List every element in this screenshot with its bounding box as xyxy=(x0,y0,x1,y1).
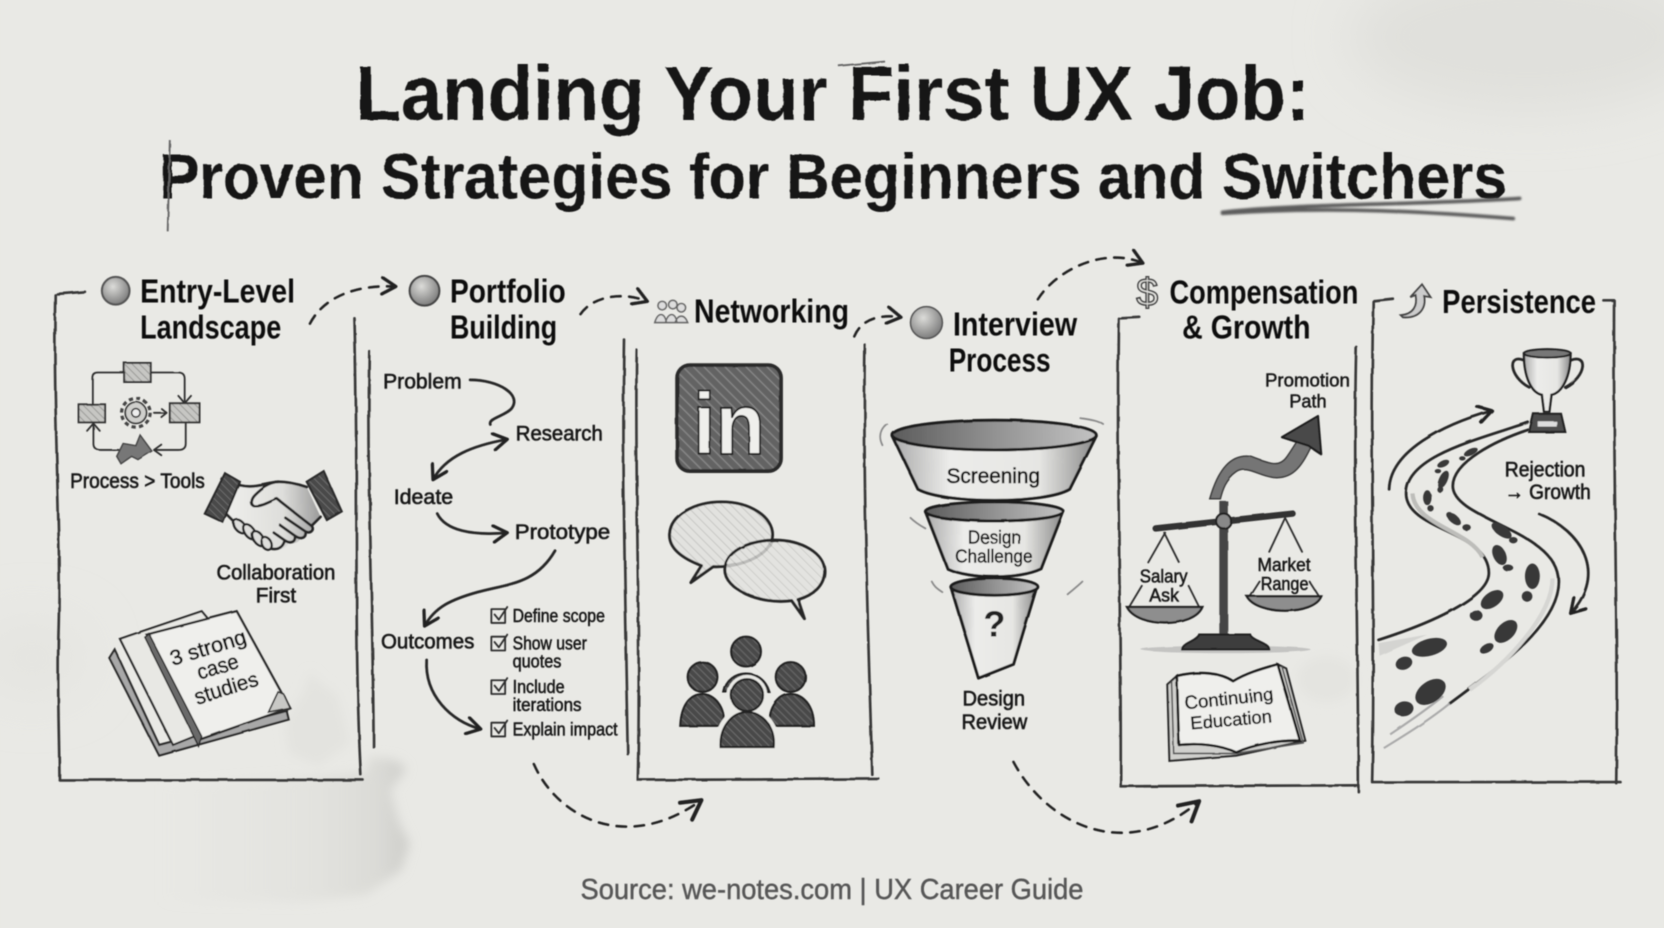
title: Proven Strategies for Beginners and Switchers xyxy=(159,141,1507,212)
process labels: problem to outcomes: Problem xyxy=(383,370,462,393)
icon: trophy xyxy=(1513,349,1583,432)
icon: open book continuing education: Education xyxy=(1189,706,1273,733)
panel: networking xyxy=(636,293,879,780)
icon: growth arrow xyxy=(1210,416,1321,499)
panel frame: networking xyxy=(636,345,879,780)
flow arrows: portfolio process xyxy=(425,380,555,729)
funnel stage: screening xyxy=(892,420,1096,500)
icon: balance scale xyxy=(1127,501,1321,653)
icon: stack of case studies xyxy=(109,611,290,756)
panel frame: compensation xyxy=(1118,317,1358,792)
heading: entry-level landscape xyxy=(102,272,295,346)
label: design review: Review xyxy=(961,711,1028,734)
label: collaboration first: Collaboration xyxy=(217,561,335,584)
heading: compensation and growth xyxy=(1136,271,1358,346)
heading: networking: Networking xyxy=(694,293,849,330)
scale labels: salary ask and market range: Salary xyxy=(1140,567,1187,587)
icon: winding road with footprints xyxy=(1379,411,1588,748)
scale labels: salary ask and market range: Range xyxy=(1261,574,1308,594)
checklist: Include xyxy=(513,677,565,697)
scale labels: salary ask and market range: Ask xyxy=(1149,586,1180,606)
funnel stage: design challenge xyxy=(925,502,1063,577)
dashed flow arrows xyxy=(310,258,1199,833)
footer source: Source: we-notes.com | UX Career Guide xyxy=(581,874,1083,906)
icon: stack of case studies: 3 strong xyxy=(167,626,249,671)
checklist: Explain impact xyxy=(513,719,618,739)
label: rejection to growth: Rejection xyxy=(1505,458,1585,481)
label: collaboration first xyxy=(217,561,335,608)
checklist: iterations xyxy=(513,695,582,715)
heading: interview process: Interview xyxy=(953,305,1078,342)
scale labels: salary ask and market range: Market xyxy=(1258,555,1311,575)
heading: entry-level landscape: Entry-Level xyxy=(140,272,295,309)
panel frame: entry-level xyxy=(55,292,363,780)
icon: speech bubbles xyxy=(670,502,825,619)
icon: handshake xyxy=(205,471,342,552)
panel frame: portfolio xyxy=(369,340,628,754)
heading: compensation and growth: $ xyxy=(1136,271,1158,315)
label: promotion path xyxy=(1265,370,1350,411)
label: rejection to growth xyxy=(1505,458,1591,504)
label: process over tools: Process > Tools xyxy=(70,470,205,493)
title: Landing Your First UX Job: xyxy=(356,51,1311,137)
checklist: Define scope xyxy=(513,606,605,626)
process labels: problem to outcomes: Research xyxy=(516,422,603,445)
heading: portfolio building: Building xyxy=(450,309,557,346)
panel: persistence xyxy=(1372,283,1620,783)
heading: entry-level landscape: Landscape xyxy=(140,309,281,346)
funnel stage: design challenge: Design xyxy=(968,527,1021,547)
panel: interview process xyxy=(881,305,1104,734)
funnel stage: screening: Screening xyxy=(947,465,1040,488)
funnel stage: design challenge: Challenge xyxy=(955,546,1033,566)
process labels: problem to outcomes xyxy=(381,370,610,653)
heading: portfolio building: Portfolio xyxy=(450,272,566,309)
heading: persistence: Persistence xyxy=(1442,283,1596,320)
title xyxy=(159,51,1507,231)
process labels: problem to outcomes: Outcomes xyxy=(381,630,474,653)
icon: stack of case studies: case xyxy=(194,650,242,685)
checklist: Show user xyxy=(513,633,587,653)
checklist xyxy=(491,606,618,739)
panel frame: persistence xyxy=(1372,299,1620,783)
icon: group of people xyxy=(680,637,814,751)
icon: stack of case studies: studies xyxy=(192,668,261,709)
title underline stroke xyxy=(1223,198,1520,219)
heading: interview process: Process xyxy=(949,341,1051,378)
panel: compensation and growth xyxy=(1118,271,1358,792)
process labels: problem to outcomes: Prototype xyxy=(515,521,610,544)
panel: entry-level landscape xyxy=(55,272,363,780)
icon: linkedin badge: in xyxy=(693,376,765,473)
heading: persistence xyxy=(1401,283,1596,320)
label: promotion path: Path xyxy=(1289,391,1327,411)
icon: funnel stages xyxy=(881,418,1104,678)
funnel stage: question: ? xyxy=(983,604,1005,645)
scale labels: salary ask and market range xyxy=(1140,555,1311,606)
label: design review: Design xyxy=(963,688,1025,711)
icon: linkedin badge xyxy=(677,365,781,473)
label: collaboration first: First xyxy=(256,585,296,608)
panel: portfolio building xyxy=(369,272,628,754)
label: rejection to growth: → Growth xyxy=(1505,481,1591,504)
icon: open book continuing education xyxy=(1167,664,1305,761)
process labels: problem to outcomes: Ideate xyxy=(394,486,453,509)
icon: open book continuing education: Continuing xyxy=(1184,684,1274,713)
label: design review xyxy=(961,688,1028,734)
heading: compensation and growth: Compensation xyxy=(1169,273,1358,310)
heading: portfolio building xyxy=(410,272,566,346)
label: promotion path: Promotion xyxy=(1265,370,1350,390)
funnel stage: question xyxy=(951,578,1038,678)
heading: interview process xyxy=(911,305,1078,378)
heading: compensation and growth: & Growth xyxy=(1182,309,1311,346)
icon: process loop diagram xyxy=(79,363,200,464)
checklist: quotes xyxy=(513,651,561,671)
